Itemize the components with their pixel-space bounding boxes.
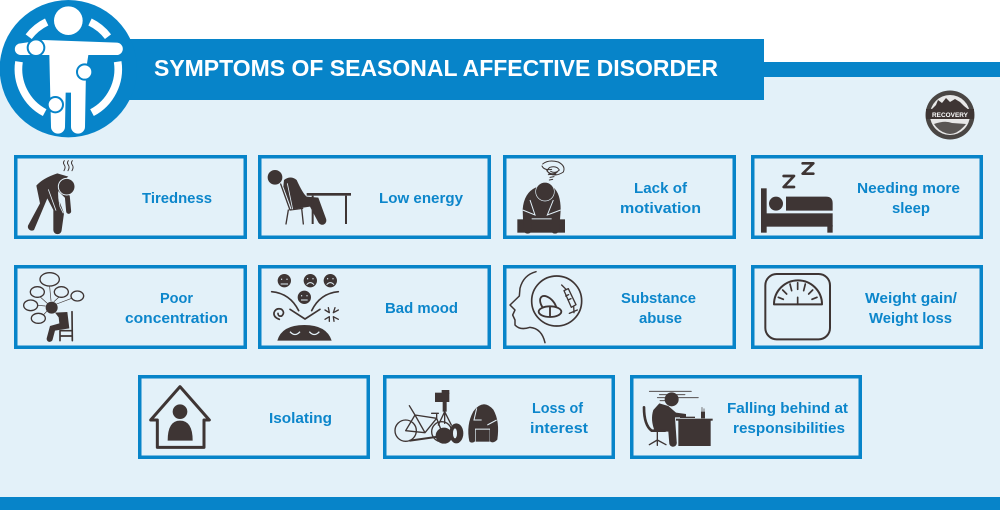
label: motivation — [620, 200, 701, 217]
label: Poor — [160, 290, 193, 307]
label — [727, 400, 848, 437]
panel: tiredness — [16, 157, 245, 237]
icon: person slumped at desk — [268, 170, 351, 225]
label: Weight gain/ — [865, 290, 958, 307]
title: SYMPTOMS OF SEASONAL AFFECTIVE DISORDER — [154, 55, 718, 81]
header banner — [125, 39, 1000, 100]
label — [621, 290, 696, 327]
label — [125, 290, 228, 327]
logo: Carolina Recovery badge — [926, 90, 974, 140]
label: Needing more — [857, 180, 960, 197]
icon: person inside house — [151, 387, 209, 447]
label — [620, 180, 701, 217]
label: Isolating — [269, 410, 332, 427]
panel: falling behind at responsibilities — [632, 377, 860, 457]
label: Lack of — [634, 180, 688, 197]
panel: needing more sleep — [753, 157, 981, 237]
label: responsibilities — [733, 420, 845, 437]
label: Weight loss — [869, 310, 952, 327]
label — [530, 400, 588, 437]
icon: head with pills and syringe — [510, 272, 582, 343]
panel: isolating — [140, 377, 368, 457]
label: concentration — [125, 310, 228, 327]
label: sleep — [892, 200, 930, 217]
footer bar — [0, 497, 1000, 510]
icon: person sleeping in bed — [761, 163, 833, 233]
label: Substance — [621, 290, 696, 307]
panel: weight gain or loss — [753, 267, 981, 347]
label: Loss of — [532, 400, 584, 417]
icon: dejected person with scribble — [517, 161, 565, 234]
panel: poor concentration — [16, 267, 245, 347]
panel: lack of motivation — [505, 157, 734, 237]
panel: low energy — [260, 157, 489, 237]
label — [865, 290, 958, 327]
label: Low energy — [379, 190, 464, 207]
icon: moods above a face — [272, 274, 338, 341]
icon: stressed person at desk — [644, 391, 713, 447]
label: interest — [530, 420, 588, 437]
label: Tiredness — [142, 190, 212, 207]
icon: tired person — [28, 161, 75, 234]
icon: bicycle, camera, guitar and person — [395, 390, 498, 444]
icon: body with pain points — [0, 0, 137, 137]
label: Bad mood — [385, 300, 458, 317]
panel: bad mood — [260, 267, 489, 347]
label — [857, 180, 960, 217]
panel: loss of interest — [385, 377, 613, 457]
icon: bathroom scale — [765, 274, 830, 339]
label: abuse — [639, 310, 682, 327]
label: Falling behind at — [727, 400, 848, 417]
panel: substance abuse — [505, 267, 734, 347]
logo: Carolina Recovery badge: RECOVERY — [932, 112, 969, 119]
icon: person with scattered thoughts — [24, 273, 84, 342]
